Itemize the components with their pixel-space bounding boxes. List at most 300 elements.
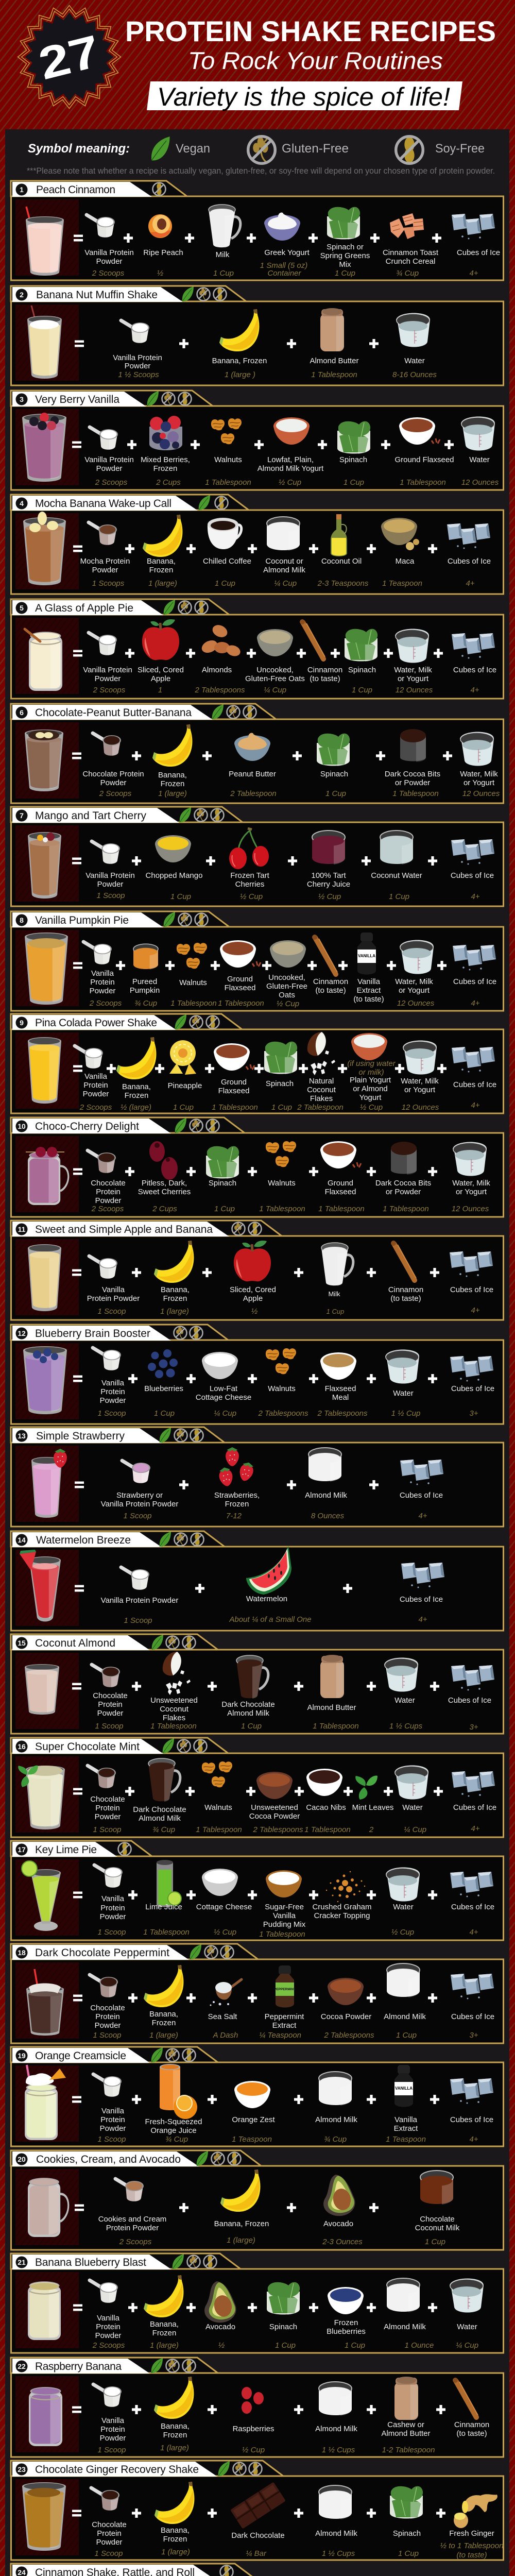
icon: shake — [25, 933, 68, 1005]
ingredient: pumpkin — [130, 944, 160, 1008]
ingredient: ice: Cubes of Ice — [451, 871, 494, 880]
ingredient: ice — [450, 2078, 493, 2144]
ingredient: greek yogurt — [260, 213, 310, 278]
icon: shake — [25, 730, 63, 791]
operators — [73, 1064, 447, 1073]
ingredient: protein powder: 1 Scoop — [123, 1512, 152, 1520]
ingredient: protein powder — [83, 942, 122, 1008]
ingredient: dark chocolate: ¼ Bar — [246, 2549, 267, 2558]
ingredient: protein powder: Protein — [100, 2115, 125, 2124]
ingredient: sea salt: Sea Salt — [208, 2012, 237, 2021]
panel: recipe 16 — [11, 1738, 504, 1837]
tab — [11, 2358, 218, 2374]
ingredient: walnuts — [205, 418, 251, 487]
panel: recipe 6 — [11, 704, 504, 803]
tab: Vanilla Pumpkin Pie — [35, 914, 129, 926]
ingredient: banana — [212, 309, 267, 379]
ingredient: apple: Sliced, Cored — [230, 1285, 276, 1294]
ingredient: protein powder — [101, 1567, 178, 1625]
ingredient: protein powder: Vanilla — [101, 1379, 125, 1387]
tab: Banana Nut Muffin Shake — [36, 289, 158, 301]
ingredient: maca — [381, 518, 422, 588]
tab: Dark Chocolate Peppermint — [35, 1947, 169, 1959]
ingredient: water — [394, 1765, 428, 1834]
ingredient: protein powder: 1 Scoops — [92, 579, 125, 588]
ingredient: strawberries — [214, 1447, 260, 1520]
symbol legend: Symbol meaning: — [28, 142, 130, 156]
ingredient: graham cracker: Cracker Topping — [314, 1911, 370, 1920]
ingredient: apple: 1 — [158, 686, 162, 694]
ingredient: vanilla extract: 1 Teaspoon — [386, 2135, 426, 2144]
panel: recipe 15 — [11, 1634, 504, 1734]
tab: Banana Blueberry Blast — [35, 2257, 146, 2268]
ingredient: spinach — [267, 2282, 300, 2350]
ingredient: protein powder: 2 Scoops — [89, 999, 122, 1008]
ingredient: protein powder: Powder — [96, 464, 122, 473]
tab: Peach Cinnamon — [36, 184, 115, 196]
ingredient: oats: ¼ Cup — [264, 686, 286, 694]
ingredient: nut butter: 1-2 Tablespoon — [382, 2446, 435, 2454]
ingredient: protein powder — [93, 2384, 126, 2454]
ingredient: banana — [152, 724, 192, 798]
ingredient: banana — [154, 2482, 194, 2556]
icon: shake — [31, 1449, 67, 1518]
ingredient: pudding mix: Pudding Mix — [263, 1920, 306, 1929]
ingredient: cottage cheese: ¼ Cup — [214, 1409, 236, 1418]
ingredient: milk: Milk — [216, 250, 230, 259]
icon: shake — [22, 1861, 61, 1931]
ingredient: avocado: 2-3 Ounces — [322, 2238, 363, 2246]
tab — [11, 1738, 228, 1754]
ingredient: cinnamon — [388, 1241, 423, 1303]
ingredient: pudding mix: Vanilla — [273, 1911, 296, 1920]
ingredient: ice: 4+ — [418, 1615, 427, 1624]
tab: 15 — [18, 1639, 26, 1647]
ingredient: spinach: 1 Cup — [214, 1205, 235, 1213]
ingredient: almonds: 2 Tablespoons — [194, 686, 245, 694]
ingredient: milk: Almond Milk — [263, 566, 305, 574]
tab: 9 — [20, 1019, 24, 1027]
ingredient: ice — [451, 839, 494, 901]
ingredient: cinnamon: Cinnamon — [388, 1285, 423, 1294]
operators — [75, 2203, 379, 2212]
tab — [11, 599, 229, 615]
tab — [11, 1634, 218, 1650]
ingredient: ice: 4+ — [418, 1512, 427, 1520]
ingredient: protein powder: Powder — [95, 1196, 121, 1205]
ingredient: flaxseed: 1 Tablespoon — [318, 1205, 365, 1213]
ingredient: protein powder — [84, 215, 134, 278]
ingredient: water — [392, 313, 437, 379]
ingredient: chocolate almond milk: ¾ Cup — [152, 1825, 175, 1834]
ingredient: banana: Frozen — [163, 2535, 187, 2544]
operators — [75, 339, 379, 348]
ingredient: cinnamon — [453, 2378, 489, 2438]
ingredient: pineapple: 1 Cup — [173, 1103, 194, 1112]
tab: 22 — [18, 2362, 26, 2370]
ingredient: cocoa bits: or Powder — [395, 778, 430, 787]
panel: recipe 23 — [11, 2461, 504, 2560]
ingredient: flaxseed: Ground — [221, 1078, 247, 1087]
ingredient: almond butter: 1 Tablespoon — [313, 1722, 359, 1731]
ingredient: water: 12 Ounces — [396, 686, 433, 694]
subtitle: To Rock Your Routines — [188, 47, 443, 74]
panel: recipe 9 — [11, 1014, 504, 1113]
tab: Coconut Almond — [35, 1637, 115, 1649]
ingredient: protein powder: Protein — [97, 2529, 122, 2538]
ingredient: water — [384, 1658, 423, 1731]
icon: shake — [26, 207, 64, 276]
ingredient: spinach — [345, 629, 377, 694]
ingredient: vanilla extract: Vanilla — [357, 977, 381, 986]
ingredient: yogurt — [347, 1033, 396, 1112]
tab — [11, 286, 246, 302]
starburst badge: 27: 27 — [33, 25, 105, 89]
ingredient: banana: Banana, — [161, 2526, 190, 2535]
icon: shake — [28, 832, 61, 899]
ingredient: walnuts: 1 Tablespoon — [205, 478, 251, 487]
ingredient: walnuts: Walnuts — [204, 1803, 232, 1812]
operators — [73, 544, 437, 553]
ingredient: protein powder: Mocha Protein — [80, 557, 130, 566]
ingredient: protein powder — [91, 2488, 127, 2558]
ingredient: protein powder: Vanilla — [97, 2314, 120, 2323]
icon: shake — [26, 1147, 68, 1205]
ingredient: peppermint extract — [259, 1965, 304, 2040]
ingredient: yogurt: (if using water — [347, 1059, 396, 1068]
ingredient: chocolate almond milk: Almond Milk — [227, 1709, 269, 1718]
tab — [11, 2564, 255, 2576]
ingredient: protein powder: Vanilla — [102, 1285, 125, 1294]
ingredient: cottage cheese: ½ Cup — [214, 1928, 236, 1937]
ingredient: protein powder: 2 Scoops — [79, 1103, 112, 1112]
ingredient: ice: Cubes of Ice — [451, 1903, 494, 1911]
ingredient: protein powder: Vanilla Protein — [113, 353, 162, 362]
tab: 8 — [20, 916, 24, 924]
tab: 16 — [18, 1742, 26, 1751]
tab: A Glass of Apple Pie — [35, 602, 133, 614]
ingredient: ice — [452, 1047, 496, 1110]
ingredient: water — [395, 940, 435, 1008]
ingredient: ice: Cubes of Ice — [451, 2012, 494, 2021]
tab — [11, 1841, 152, 1857]
ingredient: chocolate almond milk: 1 Cup — [241, 1722, 262, 1731]
ingredient: almond milk — [315, 2382, 357, 2454]
ingredient: cottage cheese: Cottage Cheese — [196, 1903, 252, 1911]
ingredient: yogurt — [258, 417, 324, 487]
ingredient: protein powder: Powder — [100, 2124, 126, 2133]
ingredient: pumpkin: Pumpkin — [130, 986, 160, 995]
tab — [11, 1014, 242, 1030]
tab: Key Lime Pie — [35, 1844, 97, 1856]
ingredient: raspberries: ½ Cup — [242, 2446, 265, 2454]
ingredient: banana: Banana, Frozen — [214, 2219, 269, 2228]
ingredient: yogurt: Plain Yogurt — [350, 1076, 391, 1084]
ingredient: yogurt: Almond Milk Yogurt — [258, 464, 324, 473]
ingredient: water — [460, 732, 500, 798]
ingredient: ginger: ½ to 1 Tablespoon — [440, 2541, 503, 2550]
ingredient: blueberries — [327, 2287, 366, 2350]
ingredient: cereal: Crunch Cereal — [386, 257, 435, 266]
ingredient: ice: Cubes of Ice — [457, 248, 500, 257]
ingredient: ice: 3+ — [469, 1409, 478, 1418]
ingredient: cherries: Pitless, Dark, — [142, 1179, 187, 1188]
tab: Orange Creamsicle — [35, 2050, 126, 2062]
ingredient: spinach: 1 Cup — [344, 478, 364, 487]
ingredient: water — [386, 1867, 420, 1937]
ingredient: cocoa bits: or Powder — [386, 1188, 421, 1196]
ingredient: protein powder: 2 Scoops — [99, 789, 132, 798]
ingredient: peach — [143, 214, 183, 278]
ingredient: protein powder — [82, 733, 144, 798]
ingredient: spinach — [264, 1042, 297, 1112]
ingredient: ice: 4+ — [469, 2135, 478, 2144]
ingredient: water: or Yogurt — [399, 986, 430, 995]
ingredient: coconut flakes: Unsweetened — [150, 1696, 198, 1705]
icon: shake — [26, 1969, 64, 2036]
ingredient: pudding mix: Sugar-Free — [265, 1903, 304, 1911]
ingredient: almond milk: 8 Ounces — [311, 1512, 345, 1520]
ingredient: cherries: 2 Cups — [152, 1205, 177, 1213]
ingredient: banana: Frozen — [152, 2329, 176, 2337]
ingredient: protein powder — [84, 427, 134, 487]
ingredient: ice: 4+ — [471, 1101, 480, 1110]
ingredient: nut butter: Almond Butter — [381, 2429, 431, 2438]
operators — [72, 856, 437, 866]
ingredient: ice — [450, 1251, 493, 1315]
ingredient: banana: Frozen — [161, 779, 184, 788]
ingredient: coffee — [203, 518, 251, 588]
tab: 13 — [18, 1432, 26, 1440]
ingredient: protein powder: Vanilla — [91, 969, 114, 978]
tagline banner: Variety is the spice of life! — [157, 82, 450, 111]
tab: Pina Colada Power Shake — [35, 1017, 157, 1029]
tab — [11, 1117, 245, 1133]
icon: shake — [22, 2482, 66, 2551]
tab: 3 — [20, 395, 24, 403]
ingredient: water: or Yogurt — [404, 1086, 436, 1094]
ingredient: almond milk — [315, 2485, 357, 2558]
panel: recipe 13 — [11, 1427, 504, 1527]
ingredient: protein powder: Protein — [100, 1904, 125, 1912]
ingredient: cherries — [229, 828, 270, 901]
ingredient: water: or Yogurt — [398, 674, 429, 683]
ingredient: ice: 4+ — [471, 1824, 480, 1833]
ingredient: banana: 1 (large) — [150, 2341, 179, 2350]
ingredient: coconut — [297, 1032, 344, 1112]
ingredient: water — [461, 416, 499, 487]
ingredient: ice: Cubes of Ice — [450, 1285, 493, 1294]
ingredient: ice: 4+ — [469, 269, 478, 278]
ingredient: almond butter: Almond Butter — [310, 357, 359, 365]
ingredient: protein powder: 1 Scoop — [95, 1722, 124, 1731]
ingredient: protein powder: Chocolate — [92, 2520, 127, 2529]
ingredient: water: Water, Milk — [460, 770, 498, 778]
ingredient: protein powder: Powder — [90, 987, 115, 995]
ingredient: apple: Apple — [151, 674, 170, 683]
operators — [73, 961, 447, 970]
ingredient: peach: Ripe Peach — [143, 248, 183, 257]
ingredient: protein powder: Strawberry or — [116, 1491, 163, 1500]
ingredient: pineapple — [168, 1040, 202, 1112]
ingredient: protein powder: Powder — [95, 2021, 121, 2030]
ingredient: protein powder: Chocolate — [90, 2004, 125, 2012]
icon: shake — [28, 1244, 61, 1311]
tab: 19 — [18, 2052, 26, 2060]
ingredient: protein powder: 1 Scoop — [124, 1616, 152, 1625]
operators — [72, 751, 452, 760]
ingredient: protein powder: Vanilla Protein — [85, 871, 135, 880]
ingredient: water: 12 Ounces — [462, 789, 500, 798]
ingredient: spinach: 1 Cup — [325, 789, 346, 798]
operators — [72, 1268, 439, 1277]
ingredient: banana: Banana, — [147, 557, 176, 566]
ingredient: protein powder: 1 Scoop — [96, 891, 125, 900]
tab: 23 — [18, 2465, 26, 2473]
ingredient: avocado: Avocado — [205, 2323, 235, 2331]
ingredient: protein powder — [93, 1348, 126, 1418]
ingredient: ice: 4+ — [471, 1306, 480, 1315]
ingredient: walnuts: 1 Tablespoon — [196, 1825, 242, 1834]
ingredient: cottage cheese: Cottage Cheese — [196, 1393, 251, 1402]
ingredient: yogurt: or milk) — [358, 1068, 384, 1077]
tab — [11, 1221, 282, 1236]
ingredient: protein powder: Chocolate — [93, 1691, 128, 1700]
ingredient: blueberries — [144, 1349, 183, 1418]
ingredient: water: 1 ½ Cup — [391, 1409, 420, 1418]
ingredient: milk: Coconut or — [265, 557, 303, 566]
ingredient: milk — [209, 205, 241, 278]
ingredient: walnuts: Walnuts — [268, 1384, 296, 1393]
operators — [75, 1480, 379, 1489]
ingredient: protein powder: Powder — [97, 1709, 123, 1718]
ingredient: cherry juice: 100% Tart — [311, 871, 346, 880]
icon: shake — [28, 2281, 61, 2340]
ingredient: spinach: 1 Cup — [275, 2341, 296, 2350]
ingredient: almond milk — [305, 1448, 347, 1520]
ingredient: lime juice: Lime Juice — [145, 1903, 182, 1911]
ingredient: protein powder: Vanilla Protein Powder — [101, 1596, 178, 1605]
ingredient: coconut flakes — [150, 1652, 198, 1731]
ingredient: cherries: ½ Cup — [240, 892, 263, 901]
ingredient: lime juice: 1 Tablespoon — [143, 1928, 190, 1937]
ingredient: pineapple: Pineapple — [168, 1081, 202, 1090]
tab — [11, 2047, 218, 2063]
ingredient: graham cracker: Crushed Graham — [312, 1903, 372, 1911]
ingredient: cereal: ¾ Cup — [396, 269, 419, 278]
ingredient: protein powder: Protein Powder — [87, 1294, 140, 1303]
ingredient: chocolate almond milk: Dark Chocolate — [221, 1700, 275, 1709]
tab — [11, 911, 229, 927]
ingredient: almonds: Almonds — [202, 666, 232, 674]
ingredient: protein powder: Vanilla Protein Powder — [101, 1500, 178, 1509]
ingredient: protein powder: 2 Scoops — [92, 269, 125, 278]
symbol legend: Soy-Free — [435, 142, 485, 156]
ingredient: ice — [400, 1563, 444, 1624]
ingredient: blueberries: 1 Cup — [154, 1409, 175, 1418]
tab: Cookies, Cream, and Avocado — [36, 2154, 181, 2165]
operators — [74, 233, 441, 243]
ingredient: peppermint extract: Peppermint — [265, 2012, 304, 2021]
ingredient: orange juice: Orange Juice — [150, 2126, 197, 2135]
ingredient: protein powder — [75, 1046, 112, 1112]
icon: shake — [28, 1037, 61, 1104]
ingredient: cocoa powder: 2 Tablespoons — [252, 1825, 303, 1834]
operators — [73, 1890, 437, 1900]
panel: recipe 12 — [11, 1325, 504, 1424]
ingredient: flaxseed: Flaxseed — [325, 1188, 356, 1196]
ingredient: apple: Sliced, Cored — [138, 666, 184, 674]
operators — [73, 1374, 437, 1383]
ingredient: oats: Gluten-Free — [266, 982, 307, 991]
ingredient: cocoa bits: 1 Tablespoon — [392, 789, 439, 798]
ingredient: nut butter — [381, 2377, 435, 2454]
ingredient: protein powder: Vanilla — [84, 1072, 108, 1081]
ingredient: flaxseed: 1 Tablespoon — [400, 478, 446, 487]
ingredient: apple: Apple — [243, 1294, 263, 1303]
ingredient: protein powder: Powder — [125, 362, 150, 370]
ingredient: pudding mix — [259, 1870, 306, 1939]
ingredient: ginger: Fresh Ginger — [449, 2529, 494, 2538]
ingredient: greek yogurt: Greek Yogurt — [264, 248, 310, 257]
ingredient: strawberries: Strawberries, — [214, 1491, 260, 1500]
ingredient: spinach: Spinach — [348, 666, 376, 674]
icon: shake — [25, 629, 62, 691]
ingredient: walnuts: 1 Tablespoon — [259, 1205, 305, 1213]
icon: shake — [20, 1550, 61, 1621]
ingredient: cottage cheese — [196, 1352, 251, 1418]
ingredient: flaxseed: Ground — [227, 975, 253, 984]
ingredient: apple: ½ — [251, 1307, 258, 1316]
ingredient: banana — [214, 2170, 269, 2245]
ingredient: graham cracker — [312, 1871, 372, 1920]
ingredient: almond milk: 1 Ounce — [405, 2341, 434, 2350]
ingredient: protein powder — [101, 1461, 178, 1520]
ingredient: coconut oil: Coconut Oil — [321, 557, 362, 566]
ingredient: nut butter: Cashew or — [387, 2420, 424, 2429]
tab: 2 — [20, 291, 24, 299]
ingredient: protein powder: Powder — [96, 2538, 122, 2547]
ingredient: walnuts — [170, 943, 217, 1008]
tab — [11, 1325, 228, 1341]
tab: 21 — [18, 2258, 26, 2266]
ingredient: coconut water: Coconut Water — [371, 871, 422, 880]
tab — [11, 807, 243, 823]
icon: shake — [25, 2065, 66, 2140]
ingredient: yogurt: Yogurt — [359, 1093, 382, 1102]
ingredient: protein powder: Protein — [98, 1700, 123, 1709]
tab: Watermelon Breeze — [36, 1534, 131, 1546]
ingredient: flaxseed: Flaxseed — [218, 1087, 249, 1095]
ingredient: chocolate almond milk: Almond Milk — [139, 1814, 181, 1823]
tab: 14 — [18, 1536, 26, 1544]
ingredient: mixed berries: Mixed Berries, — [141, 455, 190, 464]
ingredient: ice — [450, 1872, 494, 1937]
ingredient: orange zest: Orange Zest — [232, 2115, 276, 2124]
tab — [11, 495, 249, 511]
panel: recipe 10 — [11, 1117, 504, 1217]
ingredient: mint: 2 — [369, 1825, 374, 1834]
ingredient: pumpkin: Pureed — [132, 977, 157, 986]
ingredient: oats: Uncooked, — [268, 973, 305, 982]
ingredient: water — [452, 1142, 490, 1213]
tab — [11, 391, 213, 406]
ingredient: ice: 4+ — [470, 686, 479, 694]
ingredient: coconut: Coconut — [307, 1086, 336, 1094]
ingredient: walnuts — [259, 1141, 305, 1213]
ingredient: cherry juice: ½ Cup — [318, 892, 341, 901]
ingredient: protein powder — [88, 1150, 126, 1213]
